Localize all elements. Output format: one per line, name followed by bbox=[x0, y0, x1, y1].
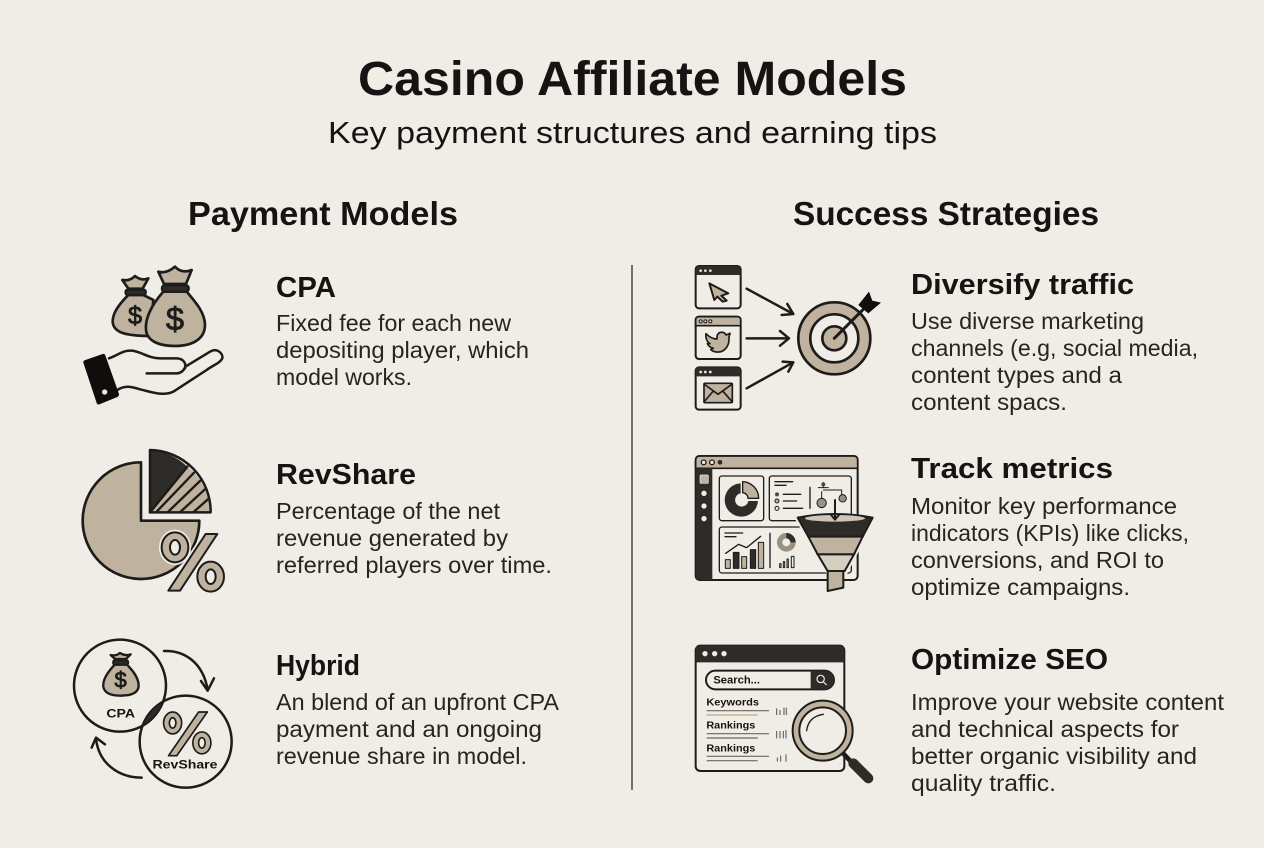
text: Optimize SEO: quality traffic. bbox=[911, 770, 1056, 796]
text: Diversify traffic: content spacs. bbox=[911, 389, 1067, 415]
text: Optimize SEO: Optimize SEO bbox=[911, 644, 1108, 676]
text: Diversify traffic: content types and a bbox=[911, 362, 1123, 388]
panel: payment models bbox=[74, 267, 559, 788]
text: Optimize SEO bbox=[911, 644, 1224, 796]
text: RevShare bbox=[276, 459, 552, 578]
icon: analytics dashboard and funnel bbox=[696, 456, 873, 591]
icon: search window with magnifier: Keywords bbox=[706, 698, 759, 709]
icon: search window with magnifier: Rankings bbox=[706, 744, 756, 755]
text: Track metrics: indicators (KPIs) like clicks, bbox=[911, 520, 1189, 546]
icon: search window with magnifier: Rankings bbox=[706, 721, 756, 732]
icon: money bags on hand: $ bbox=[166, 300, 184, 337]
panel: success strategies bbox=[696, 266, 1224, 796]
title: Casino Affiliate Models bbox=[358, 53, 907, 106]
icon: search window with magnifier: Search... bbox=[713, 675, 760, 687]
text: RevShare: Percentage of the net bbox=[276, 498, 500, 524]
text: RevShare: revenue generated by bbox=[276, 525, 508, 551]
icon: pie chart with percent bbox=[83, 450, 224, 592]
icon: hybrid circles: $ bbox=[115, 668, 127, 693]
icon: money bags on hand bbox=[83, 267, 222, 404]
text: Hybrid: Hybrid bbox=[276, 650, 360, 682]
text: CPA: Fixed fee for each new bbox=[276, 310, 512, 336]
text: Track metrics: optimize campaigns. bbox=[911, 574, 1130, 600]
icon: search window with magnifier bbox=[696, 646, 868, 778]
icon: traffic channels to target bbox=[696, 266, 881, 410]
icon: hybrid circles bbox=[74, 640, 232, 788]
text: Optimize SEO: better organic visibility and bbox=[911, 743, 1197, 769]
heading: payment models: Payment Models bbox=[188, 195, 458, 232]
text: Track metrics: Track metrics bbox=[911, 453, 1113, 485]
text: Optimize SEO: and technical aspects for bbox=[911, 716, 1179, 742]
text: Hybrid: revenue share in model. bbox=[276, 743, 527, 769]
heading: success strategies: Success Strategies bbox=[793, 195, 1099, 232]
text: Diversify traffic: Use diverse marketing bbox=[911, 308, 1144, 334]
text: Diversify traffic bbox=[911, 269, 1198, 415]
text: CPA: depositing player, which bbox=[276, 337, 529, 363]
icon: hybrid circles: RevShare bbox=[152, 758, 218, 772]
text: Optimize SEO: Improve your website content bbox=[911, 689, 1224, 715]
subtitle: Key payment structures and earning tips bbox=[328, 115, 937, 150]
icon: money bags on hand: $ bbox=[128, 302, 142, 330]
text: CPA: model works. bbox=[276, 364, 412, 390]
text: RevShare: RevShare bbox=[276, 459, 416, 491]
text: Diversify traffic: Diversify traffic bbox=[911, 269, 1134, 301]
text: CPA: CPA bbox=[276, 272, 336, 304]
text: Hybrid: payment and an ongoing bbox=[276, 716, 542, 742]
icon: hybrid circles: CPA bbox=[106, 707, 135, 721]
text: Hybrid: An blend of an upfront CPA bbox=[276, 689, 559, 715]
text: RevShare: referred players over time. bbox=[276, 552, 552, 578]
text: CPA bbox=[276, 272, 529, 390]
text: Track metrics: conversions, and ROI to bbox=[911, 547, 1164, 573]
text: Track metrics: Monitor key performance bbox=[911, 493, 1177, 519]
text: Track metrics bbox=[911, 453, 1189, 600]
text: Diversify traffic: channels (e.g, social media, bbox=[911, 335, 1198, 361]
text: Hybrid bbox=[276, 650, 559, 769]
